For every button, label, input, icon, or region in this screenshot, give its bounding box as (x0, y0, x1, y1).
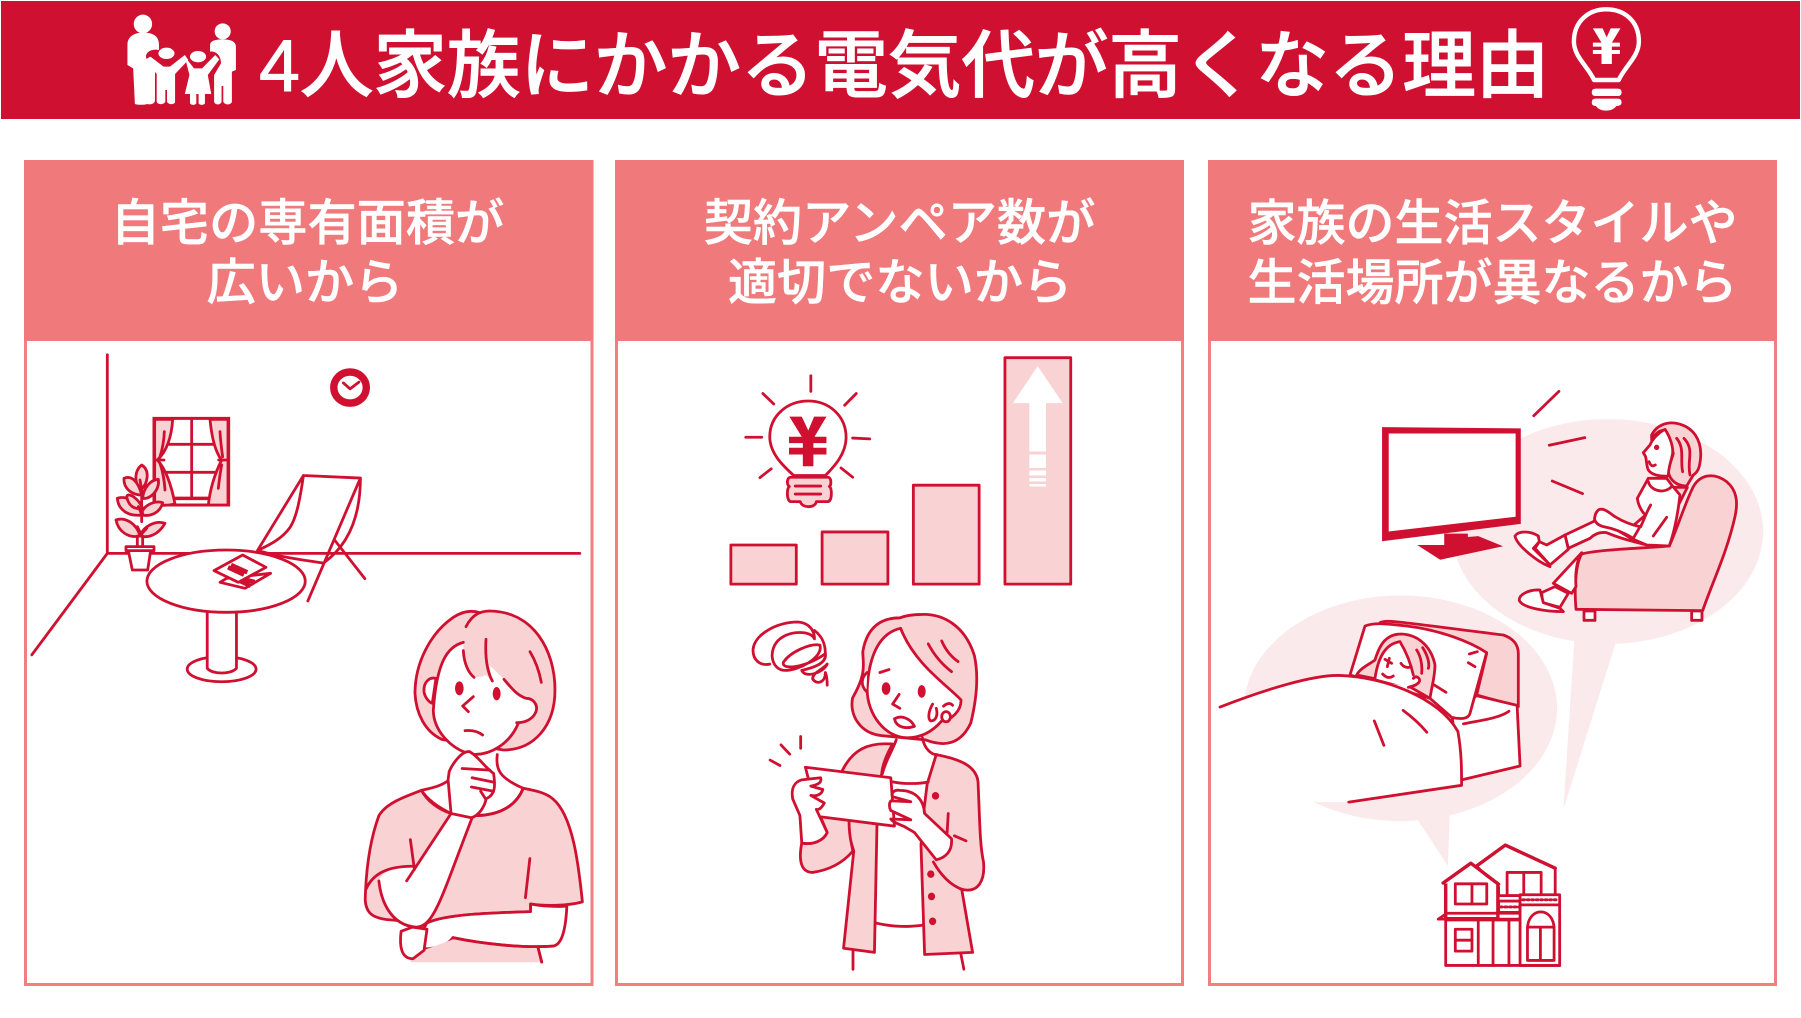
smartphone bill (805, 767, 894, 826)
panel 3 heading: 生活場所が異なるから (1247, 256, 1738, 310)
panel 2 heading (615, 160, 1184, 341)
panel 3 heading: 家族の生活スタイルや (1247, 197, 1738, 251)
title banner (1, 1, 1800, 119)
woman thinking (365, 611, 582, 962)
shirt (365, 788, 582, 923)
hands (792, 778, 827, 844)
panel 2 heading: 適切でないから (728, 256, 1072, 310)
woman in armchair (1515, 423, 1737, 620)
worried woman (792, 614, 984, 969)
panel 3: different lifestyles (1208, 160, 1777, 984)
icon: house (1438, 845, 1560, 965)
window with curtains (154, 418, 229, 505)
panel 3 heading (1208, 160, 1777, 341)
panel 1 frame (26, 162, 592, 984)
speech bubble: living room (1452, 419, 1763, 809)
panel 1 heading (24, 160, 593, 341)
round table with papers (147, 550, 305, 682)
icon: television (1382, 391, 1585, 560)
chair (258, 476, 365, 601)
illustration: rising bill chart and worried woman (731, 358, 1071, 969)
cardigan (842, 744, 893, 803)
icon: yen light bulb (746, 376, 870, 507)
raised arm (379, 814, 472, 927)
illustration: room and thinking woman (32, 355, 582, 962)
armchair (1584, 611, 1702, 620)
panel 1: floor area (24, 160, 593, 984)
panel 2 frame (616, 162, 1182, 984)
arrow: upward (1013, 366, 1063, 486)
icon: confused scribble (753, 622, 827, 685)
bar chart rising (731, 358, 1071, 584)
icon: light bulb with yen (1574, 9, 1639, 111)
tap marks (770, 736, 801, 766)
sleeping person in bed (1220, 621, 1520, 802)
head and hair (415, 611, 555, 754)
panel 3 frame (1210, 162, 1776, 984)
panel 2: contract amperage (615, 160, 1184, 984)
panel 2 heading: 契約アンペア数が (704, 196, 1095, 251)
icon: wall clock (330, 368, 370, 407)
panel 1 heading: 自宅の専有面積が (111, 196, 504, 251)
illustration: TV room, bedroom and house (1220, 391, 1763, 965)
speech bubble: bedroom (1244, 595, 1557, 866)
icon: family of four (127, 15, 236, 105)
potted plant (116, 465, 165, 570)
papers on the table (214, 555, 271, 588)
seated figure (1672, 487, 1687, 503)
bed and sleeper (1380, 621, 1518, 707)
neck and hand (421, 755, 523, 816)
title text: 4人家族にかかる電気代が高くなる理由 (259, 24, 1549, 107)
lower arm (412, 904, 567, 949)
panel 1 heading: 広いから (207, 256, 403, 310)
room lines (32, 355, 580, 655)
